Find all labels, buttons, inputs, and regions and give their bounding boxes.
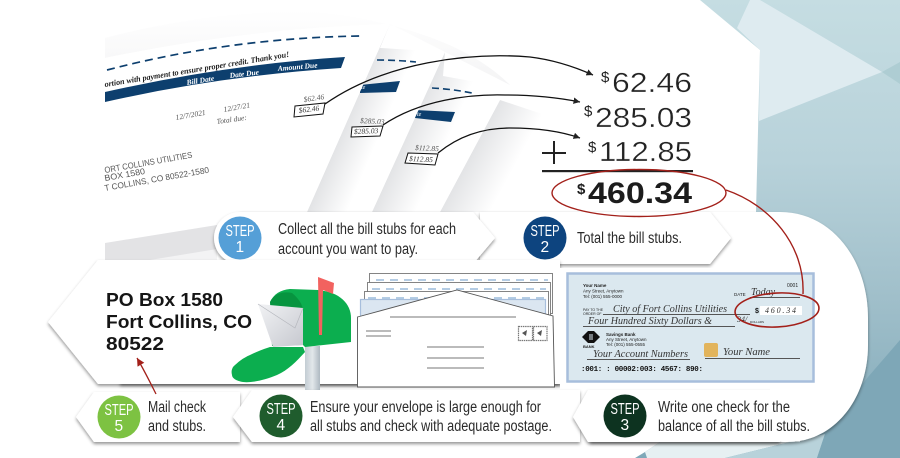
bill 1 sheet: 12/7/2021 bbox=[175, 108, 206, 122]
step 5 text: and stubs. bbox=[148, 418, 206, 435]
step 1 text: account you want to pay. bbox=[278, 241, 418, 258]
step 1 badge bbox=[218, 216, 262, 260]
bill 1 sheet: T COLLINS, CO 80522-1580 bbox=[104, 165, 210, 193]
address text: 80522 bbox=[106, 333, 164, 354]
check behind bbox=[360, 300, 546, 330]
bill 1 sheet: Date Due bbox=[228, 67, 260, 80]
mailbox post bbox=[305, 346, 320, 390]
step 4 banner bbox=[233, 390, 580, 442]
icon: bank logo bbox=[582, 331, 600, 349]
back stub 3 bbox=[364, 292, 548, 332]
payer details: Tel: (001) 555-0000 bbox=[583, 294, 623, 299]
stamps bbox=[518, 326, 547, 340]
check bbox=[568, 274, 814, 382]
stub callout 285.03 bbox=[351, 116, 385, 137]
faint back shadow of sheets bbox=[105, 10, 510, 85]
step 3 text: Write one check for the bbox=[658, 399, 790, 416]
written amount: Four Hundred Sixty Dollars & bbox=[587, 316, 712, 327]
stub callout 285.03: $285.03 bbox=[354, 126, 379, 136]
step 5 badge: 5 bbox=[114, 418, 123, 435]
written amount bbox=[583, 315, 764, 327]
teal faceted background bbox=[635, 0, 900, 458]
icon: mailbox bbox=[232, 277, 351, 390]
step 2 badge: 2 bbox=[540, 239, 549, 256]
check number: 0001 bbox=[787, 283, 798, 289]
stub callout 112.85 bbox=[405, 143, 439, 165]
amount 62.46: $ bbox=[601, 69, 610, 86]
step 4 badge: STEP bbox=[266, 401, 296, 418]
step 4 text bbox=[310, 399, 552, 435]
mailbox door bbox=[232, 347, 305, 382]
sum rule bbox=[542, 170, 693, 172]
payee line bbox=[583, 304, 750, 316]
bill 1 sheet: BOX 1580 bbox=[104, 166, 146, 183]
arrow: stub 62.46 to sum bbox=[325, 56, 593, 104]
bill 1 sheet: 12/27/21 bbox=[223, 100, 251, 114]
step 3 banner bbox=[573, 386, 810, 442]
red ellipse on check amount bbox=[734, 291, 820, 329]
step 1 badge: STEP bbox=[226, 223, 254, 240]
stub callout 62.46 bbox=[294, 92, 325, 117]
bill 1 sheet: ortion with payment to ensure proper credit. Thank you! bbox=[104, 50, 290, 89]
signature bbox=[705, 347, 800, 358]
payee line: City of Fort Collins Utilities bbox=[613, 304, 727, 315]
back stub 1 bbox=[370, 274, 552, 314]
amount 285.03: $ bbox=[584, 103, 593, 120]
bill 1 sheet bbox=[104, 24, 390, 212]
payer details: Your Name bbox=[583, 283, 607, 288]
step 1 text bbox=[278, 221, 456, 258]
stub callout 112.85: $112.85 bbox=[415, 143, 439, 153]
bank details: Any Street, Anytown bbox=[606, 337, 647, 342]
amount 112.85: $ bbox=[588, 139, 597, 156]
stub callout 62.46: $62.46 bbox=[298, 104, 320, 115]
step 3 text bbox=[658, 399, 810, 435]
amount 112.85: 112.85 bbox=[599, 136, 692, 167]
bank details bbox=[606, 332, 647, 347]
amount box bbox=[755, 306, 802, 315]
step 1 badge: 1 bbox=[236, 239, 244, 256]
step 1 banner bbox=[214, 212, 495, 264]
signature: Your Name bbox=[723, 347, 771, 358]
arrow: stub 112.85 to sum bbox=[438, 128, 580, 153]
step 3 badge: 3 bbox=[620, 417, 629, 434]
red arrow to address bbox=[137, 358, 156, 394]
step 3 badge bbox=[604, 394, 646, 438]
mailbox flag bbox=[318, 277, 334, 335]
amount 62.46: 62.46 bbox=[612, 67, 692, 98]
step 4 badge: 4 bbox=[276, 417, 286, 434]
memo line: Your Account Numbers bbox=[593, 349, 688, 360]
step 4 text: Ensure your envelope is large enough for bbox=[310, 399, 541, 416]
MICR line: :001: : 00002:003: 4567: 890: bbox=[581, 366, 703, 374]
plus sign bbox=[542, 141, 566, 164]
main white rounded panel bbox=[120, 212, 868, 442]
step 5 badge: STEP bbox=[104, 402, 134, 419]
arrow: stub 285.03 to sum bbox=[383, 95, 580, 125]
bill 2 sheet: te bbox=[361, 85, 366, 91]
date line: Today bbox=[751, 287, 776, 298]
address panel bbox=[48, 260, 800, 390]
bill 3 sheet bbox=[372, 52, 545, 212]
stub callout 112.85: $112.85 bbox=[409, 154, 433, 164]
bank details: Savings Bank bbox=[606, 332, 636, 337]
step 5 badge bbox=[98, 396, 140, 438]
date line bbox=[734, 287, 800, 298]
step 4 badge bbox=[260, 394, 302, 438]
step 3 badge: STEP bbox=[610, 401, 640, 418]
back stub 2 bbox=[368, 282, 550, 322]
envelope in mailbox bbox=[258, 304, 303, 347]
stub callout 285.03: $285.03 bbox=[360, 116, 385, 126]
bill 1 sheet: Amount Due bbox=[276, 60, 318, 73]
stub callout 62.46: $62.46 bbox=[303, 92, 325, 104]
icon: bank logo: BANK bbox=[583, 344, 595, 349]
red ellipse on total bbox=[552, 170, 726, 216]
written amount: 34/ bbox=[736, 315, 748, 324]
bill stubs fanned stack bbox=[104, 10, 545, 212]
step 4 text: all stubs and check with adequate postage. bbox=[310, 418, 552, 435]
bill 1 sheet: Bill Date bbox=[185, 74, 215, 87]
bill 3 sheet: te bbox=[417, 112, 422, 118]
step 2 banner bbox=[480, 212, 731, 264]
step 2 badge bbox=[524, 216, 566, 260]
date line: DATE bbox=[734, 292, 746, 297]
amount 285.03: 285.03 bbox=[595, 102, 692, 133]
step 5 banner bbox=[76, 392, 240, 442]
step 5 text bbox=[148, 399, 206, 435]
bill 1 sheet: ORT COLLINS UTILITIES bbox=[104, 150, 193, 175]
total amount: $ bbox=[577, 181, 586, 198]
amount box: 460.34 bbox=[765, 306, 796, 315]
written amount: DOLLARS bbox=[750, 320, 764, 324]
bill 1 sheet: Total due: bbox=[216, 113, 247, 126]
amount box: $ bbox=[755, 308, 759, 315]
payee line: ORDER OF bbox=[583, 312, 601, 316]
step 1 text: Collect all the bill stubs for each bbox=[278, 221, 456, 238]
red connector total to check bbox=[726, 190, 803, 294]
envelopes bbox=[358, 274, 554, 387]
icon: security chip bbox=[704, 343, 718, 357]
step 5 text: Mail check bbox=[148, 399, 206, 416]
total amount: 460.34 bbox=[588, 177, 692, 210]
mailbox body bbox=[270, 289, 351, 347]
payer details: Any Street, Anytown bbox=[583, 288, 624, 294]
step 3 text: balance of all the bill stubs. bbox=[658, 418, 810, 435]
gray sheet remnants left of step 1 bbox=[105, 225, 217, 260]
step 2 text: Total the bill stubs. bbox=[577, 230, 682, 247]
envelope front bbox=[358, 290, 554, 387]
mailbox inside bbox=[270, 292, 303, 346]
bank details: Tel: (001) 555-0555 bbox=[606, 342, 646, 347]
bill 2 sheet bbox=[307, 24, 445, 212]
payee line: PAY TO THE bbox=[583, 308, 604, 312]
address text bbox=[106, 289, 252, 354]
address text: Fort Collins, CO bbox=[106, 311, 252, 332]
sum column bbox=[542, 67, 693, 210]
step 2 badge: STEP bbox=[530, 223, 560, 240]
payer details bbox=[583, 283, 624, 299]
address text: PO Box 1580 bbox=[106, 289, 223, 310]
